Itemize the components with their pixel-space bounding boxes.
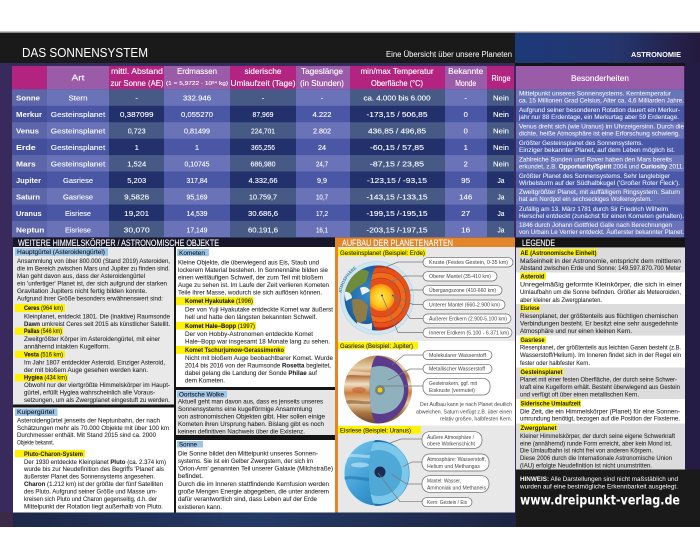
legend entry: Zwergplanet: (IAU) erfolgte Neudefinition ist nicht unumstritten. — [520, 463, 652, 470]
panel: Gasriese — [338, 341, 515, 426]
panel: Kometen: lockerem Material bestehen. In Sonnennähe bilden sie — [178, 267, 328, 274]
table row: Jupiter: Jupiter — [16, 176, 41, 185]
column: Besonderheiten text: Wirbelsturm auf der Südhalbkugel ('Großer Roter Fleck'). — [519, 180, 680, 187]
panel: Gasriese: Gasriese (Beispiel: Jupiter) — [340, 343, 413, 350]
legend entry: Gasriese: Riesenplanet, der größtenteils aus leichten Gasen besteht (z.B. — [520, 345, 681, 352]
panel: Sonne: große Mengen Energie abgegeben, die unter anderem — [178, 489, 329, 496]
legend entry: AE: Abstand zwischen Erde und Sonne: 149.597.870.700 Meter — [520, 265, 682, 272]
legend entry: Siderische Umlaufzeit: umrundung benötigt, bezogen auf die Position der Fixsterne. — [520, 416, 680, 423]
table row: Erde: Erde — [16, 143, 36, 152]
caption: Aufbau: abweichen. Saturn verfügt z.B. über einen — [416, 409, 512, 415]
table header row: mittl. Abstand — [111, 67, 163, 76]
table header row: zur Sonne (AE) — [110, 79, 164, 88]
table row: Sonne: Sonne — [16, 94, 40, 102]
panel: Hauptgürtel: Kleinplanet, entdeckt 1801. Die (inaktive) Raumsonde — [24, 314, 170, 320]
callouts: jupiter layers: Eiskruste (vermutet) — [429, 388, 475, 394]
table row: Sonne: 332.946 — [183, 94, 211, 102]
table row: Merkur: 0,055270 — [181, 110, 213, 119]
section heading: Aufbau der Planetenarten: AUFBAU DER PLANETENARTEN — [342, 238, 453, 248]
caption: Aufbau: Der Aufbau kann je nach Planet deutlich — [420, 402, 512, 408]
panel: Hauptgürtel: Ansammlung von über 800.000 (Stand 2019) Asteroiden, — [17, 258, 170, 265]
table row: Jupiter: 9,9 — [317, 176, 327, 185]
table row: Erde — [16, 143, 509, 152]
table row: Jupiter: 4.332,66 — [248, 176, 278, 185]
table row: Uranus: -199,15 /-195,15 — [366, 209, 428, 218]
panel: Oortsche Wolke: Aktuell geht man davon aus, dass es jenseits unseres — [178, 398, 324, 406]
panel: Oortsche Wolke: Kometen ihren Ursprung haben. Bislang gibt es noch — [178, 421, 324, 428]
table row: Uranus: 17,2 — [316, 209, 328, 218]
subtitle: Eine Übersicht über unsere Planeten — [386, 50, 512, 59]
column: Besonderheiten text: Herschel entdeckt (zunächst für einen Kometen gehalten). — [519, 213, 684, 220]
column: Besonderheiten text: Größter Planet des Sonnensystems. Sehr langlebiger — [519, 173, 670, 180]
table row: Jupiter: 95 — [461, 176, 470, 185]
panel: Kuipergürtel: Asteroidengürtel jenseits der Neptunbahn, der nach — [17, 417, 160, 424]
panel: Sonne: Sonne — [179, 442, 197, 448]
panel: Gesteinsplanet: Gesteinsplanet (Beispiel: Erde) — [340, 250, 425, 257]
panel: Kometen: Kometen — [179, 250, 205, 257]
table header row: Tageslänge — [301, 67, 343, 76]
table row: Venus: Venus — [16, 126, 39, 136]
caption: Aufbau — [416, 402, 512, 422]
table header row: Monde — [455, 79, 476, 88]
icon: earth cross-section: ATMOSPHÄRE — [338, 266, 356, 293]
table row: Erde: 24 — [318, 143, 326, 152]
legend entry: Zwergplanet: Kleiner Himmelskörper, der durch seine eigene Schwerkraft — [520, 433, 675, 440]
column: Besonderheiten text: Zahlreiche Sonden und Rover haben den Mars bereits — [519, 156, 672, 163]
table row: Saturn: Saturn — [16, 192, 40, 201]
table row: Uranus — [16, 209, 505, 218]
icon: jupiter cross-section — [344, 355, 423, 424]
table row: Mars: Mars — [16, 160, 36, 168]
panel: Kuipergürtel: Kuipergürtel — [17, 409, 55, 416]
table header row: Oberfläche (°C) — [371, 79, 423, 88]
table row: Mars: -87,15 / 23,85 — [370, 160, 424, 168]
table row: Venus: Gesteinsplanet — [51, 126, 106, 136]
callouts: jupiter layers: Metallischer Wasserstoff — [429, 367, 486, 373]
panel: Kuipergürtel: Objekte bekannt. — [17, 440, 54, 447]
panel: Hauptgürtel: Man geht davon aus, dass der Asteroidengürtel — [17, 273, 145, 280]
table row: Jupiter — [16, 176, 505, 185]
table row: Jupiter: 5,203 — [127, 176, 146, 185]
panel: Oortsche Wolke — [176, 387, 335, 436]
table row: Neptun: Eisriese — [65, 225, 91, 234]
legend entry: Zwergplanet: Diese 2006 durch die Internationale Astronomische Union — [520, 455, 672, 462]
table row: Mars: Nein — [493, 160, 509, 168]
panel: Kometen: 2014 bis 2016 von der Raumsonde Rosetta begleitet, — [185, 363, 331, 370]
panel: Kuipergürtel: des Pluto. Aufgrund seiner Größe und Masse um- — [24, 489, 157, 496]
callouts: earth layers: Übergangszone (410-660 km) — [429, 287, 496, 294]
legend entry: Gasriese: Wasserstoff/Helium). Im Inneren findet sich in der Regel ein — [520, 352, 681, 359]
callouts: earth layers: Kruste (Festes Gestein, 0-35 km) — [429, 260, 508, 266]
table row: Merkur: 0 — [464, 110, 468, 119]
legend entry: Gesteinsplanet: Gesteinsplanet — [520, 369, 563, 376]
panel: Sonne: Durch die im Inneren stattfindende Kernfusion werden — [178, 481, 329, 488]
legend entry: Eisriese: Eisriese — [520, 305, 540, 312]
table row: Saturn — [16, 192, 505, 201]
panel: Kuipergürtel: Mittelpunkt der Rotation liegt außerhalb von Pluto. — [24, 504, 163, 511]
panel: Oortsche Wolke: Sonnensystems eine kugelförmige Ansammlung — [178, 406, 312, 413]
table row: Neptun: -203,15 /-197,15 — [366, 225, 428, 234]
panel: Hauptgürtel: annähernd intakten Kugelform. — [24, 344, 110, 350]
table row: Jupiter: 317,84 — [186, 176, 208, 185]
panel: Hauptgürtel: Pallas (546 km) — [24, 328, 62, 335]
table row: Merkur: Nein — [493, 110, 509, 119]
legend entry: Zwergplanet — [520, 424, 675, 470]
footer note and website — [516, 470, 700, 527]
table header row: (1 = 5,9722 · 10²⁴ kg) — [166, 81, 228, 87]
legend entry: Zwergplanet: Zwergplanet — [520, 425, 557, 432]
legend entry: Gesteinsplanet: und verfügt oft über einen metallischen Kern. — [520, 392, 639, 399]
table row: Jupiter: -123,15 / -93,15 — [367, 176, 427, 185]
panel: Legende: LEGENDE — [522, 238, 555, 248]
callouts: uranus layers: Mantel: Wasser, — [427, 479, 461, 485]
panel: Kometen: Nicht mit bloßem Auge beobachtbarer Komet. Wurde — [185, 355, 333, 362]
panel: Kuipergürtel: wurde bis zur Neudefinition des Begriffs 'Planet' als — [23, 466, 165, 473]
legend entry: Gasriese: fester oder halbfester Kern. — [520, 360, 590, 367]
column: Besonderheiten text: dichte, heiße Atmosphäre ist eine Erforschung schwierig. — [519, 130, 680, 138]
legend entry: Siderische Umlaufzeit — [520, 400, 680, 423]
panel: Kometen: einen weitläufigen Schweif, der zum Teil mit bloßem — [178, 274, 323, 282]
panel: Kuipergürtel: Charon (1.212 km) ist der größte der fünf Satelliten — [24, 481, 163, 488]
note: wurden auf eine bestmögliche Erkennbarkeit ausgelegt. — [519, 483, 678, 490]
panel: Hauptgürtel: Obwohl nur der viertgrößte Himmelskörper im Haupt- — [24, 382, 170, 389]
table row: Erde: 365,256 — [251, 143, 275, 152]
legend entry: Gasriese — [520, 337, 681, 367]
table row: Sonne: Nein — [493, 94, 509, 102]
legend entry: Asteroid: aber kleiner als Zwergplaneten. — [520, 297, 602, 304]
panel: Kometen: Der von Yuji Hyakutake entdeckte Komet war äußerst — [185, 306, 333, 314]
category label: ASTRONOMIE — [631, 50, 681, 59]
table row: Merkur: Merkur — [16, 110, 42, 119]
panel: Kuipergürtel: Schätzungen mehr als 70.000 Objekte mit über 100 km — [17, 425, 169, 432]
legend entry: Siderische Umlaufzeit: Die Zeit, die ein Himmelskörper (Planet) für eine Sonnen- — [520, 409, 680, 416]
table row: Merkur: Gesteinsplanet — [51, 110, 106, 119]
title: DAS SONNENSYSTEM — [22, 45, 148, 60]
column: Besonderheiten text: Aufgrund seiner besonderen Rotation dauert ein Merkur- — [519, 107, 680, 114]
table row: Saturn: 10,7 — [316, 192, 328, 201]
column: Besonderheiten text — [518, 91, 685, 236]
callouts: uranus layers — [422, 432, 489, 507]
panel: Eisriese — [338, 426, 515, 512]
legend entry: Zwergplanet: Die Umlaufbahn ist nicht frei von anderen Körpern. — [520, 448, 653, 455]
panel: Gesteinsplanet — [338, 247, 515, 341]
table row: Mars: 1,524 — [127, 160, 146, 168]
table header row: Erdmassen — [177, 67, 217, 76]
panel: Sonne: Die Sonne bildet den Mittelpunkt unseres Sonnen- — [178, 450, 318, 458]
panel: Hauptgürtel: setzungen, um als Zwergplanet eingestuft zu werden. — [24, 397, 170, 404]
table row: Venus: Nein — [493, 126, 509, 136]
column: Besonderheiten text: Zweitgrößter Planet, mit auffälligem Ringsystem. Saturn — [519, 189, 681, 196]
panel: Sonne: systems. Sie ist ein Gelber Zwergstern, der sich im — [178, 458, 313, 465]
table header row — [12, 66, 684, 89]
table header row: min/max Temperatur — [360, 67, 434, 76]
panel: Kuipergürtel: Durchmesser enthält. Mit Stand 2015 sind ca. 2000 — [17, 432, 156, 439]
table row: Venus: 0,81499 — [184, 126, 210, 136]
table row: Erde: -60,15 / 57,85 — [370, 143, 424, 152]
legend entry: Asteroid — [520, 273, 683, 304]
table header row: Art — [72, 74, 86, 82]
panel: Kuipergürtel: äußerster Planet des Sonnensystems angesehen. — [24, 474, 155, 481]
icon: earth cross-section — [338, 261, 423, 335]
column: Besonderheiten text: Mittelpunkt unseres Sonnensystems. Kerntemperatur — [519, 91, 671, 98]
callouts: earth layers: Äußerer Erdkern (2.900-5.100 km) — [429, 316, 507, 322]
panel: Kuipergürtel — [13, 404, 176, 512]
column: Besonderheiten text: Venus dreht sich (wie Uranus) im Uhrzeigersinn. Durch die — [519, 124, 685, 130]
section heading: Aufbau der Planetenarten — [335, 238, 515, 512]
panel: Kometen: Komet Hale–Bopp (1997) — [185, 323, 255, 330]
legend entry: Gesteinsplanet: Planet mit einer festen Oberfläche, der durch seine Schwer- — [520, 377, 677, 384]
legend entry: Asteroid: Umlaufbahn um die Sonne befinden. Größer als Meteoroiden, — [520, 289, 681, 296]
table row: Merkur: -173,15 / 506,85 — [366, 110, 428, 119]
table header row: Besonderheiten — [571, 74, 629, 83]
table row: Sonne: Stern — [68, 94, 88, 102]
table header row: Ringe — [492, 74, 510, 83]
panel: Hauptgürtel — [13, 247, 174, 404]
panel: Kometen: hell und hatte den längsten bekannten Schweif. — [185, 314, 317, 321]
table row: Uranus: Eisriese — [65, 209, 91, 218]
table row: Jupiter: Ja — [498, 176, 505, 185]
table row: Saturn: -143,15 /-133,15 — [366, 192, 428, 201]
table row: Mars: 686,980 — [250, 160, 276, 168]
column: Besonderheiten text: hat am Nordpol ein sechseckiges Wolkensystem. — [519, 196, 652, 203]
table row: Neptun: 17,149 — [186, 225, 208, 234]
panel: Kometen — [174, 247, 335, 512]
table row: Uranus: 19,201 — [124, 209, 149, 218]
callouts: earth layers: Innerer Erdkern (5.100 - 6.371 km) — [429, 330, 509, 336]
legend entry: Asteroid: Asteroid — [520, 274, 544, 280]
panel: Kometen: Teile ihrer Masse, wodurch sie sich auflösen können. — [178, 290, 322, 296]
callouts: uranus layers: Atmosphäre: Wasserstoff, — [427, 457, 486, 463]
table row: Neptun: 16,1 — [316, 225, 328, 234]
table row: Neptun: 60.191,6 — [248, 225, 278, 234]
table row: Mars: Gesteinsplanet — [51, 160, 106, 168]
table row: Mars: 0,10745 — [184, 160, 210, 168]
table row: Mars — [16, 160, 509, 168]
panel: Kometen: dabei gelang die Landung der Sonde Philae auf — [185, 370, 317, 377]
callouts: jupiter layers: Molekularer Wasserstoff — [429, 353, 487, 359]
callouts: uranus layers: Ammoniak und Methaneis — [427, 486, 486, 492]
table row: Uranus: Ja — [498, 209, 505, 218]
column: Besonderheiten text: erkundet, z.B. Opportunity/Spirit 2004 und Curiosity 2011. — [519, 163, 684, 170]
callouts: earth layers: Unterer Mantel (660-2.900 km) — [429, 302, 500, 308]
table header row: (in Stunden) — [300, 79, 344, 88]
panel: Hauptgürtel: Vesta (516 km) — [24, 352, 63, 358]
table row: Merkur — [16, 110, 509, 119]
legend entry: Gesteinsplanet: kraft eine Kugelform erhält. Besteht überwiegend aus Gestein — [520, 384, 680, 391]
callouts: uranus layers: obere Wolkenschicht — [427, 442, 476, 448]
panel: Hauptgürtel: Gravitation Jupiters nicht fertig bilden konnte. — [17, 288, 147, 295]
panel: Hauptgürtel: Ceres (964 km) — [24, 305, 63, 312]
legend entry: AE: Maßeinheit in der Astronomie, entspricht dem mittleren — [520, 258, 681, 265]
table row: Venus: 224,701 — [251, 126, 275, 136]
legend entry: Gasriese: Gasriese — [520, 337, 545, 344]
panel: Hauptgürtel: Hygiea (434 km) — [24, 375, 67, 382]
table row: Venus: 2.802 — [313, 126, 331, 136]
panel: Oortsche Wolke: von astronomischen Objekten gibt. Hier sollen einige — [178, 414, 325, 420]
panel: Hauptgürtel: die im Bereich zwischen Mars und Jupiter zu finden sind. — [17, 266, 170, 272]
callouts: earth layers: Oberer Mantel (35-410 km) — [429, 274, 491, 280]
panel: Oortsche Wolke: keinen definitiven Nachweis über die Existenz. — [178, 428, 305, 436]
table row: Saturn: Ja — [498, 192, 505, 201]
table row: Mars: 2 — [464, 160, 468, 168]
table row: Sonne: - — [321, 94, 324, 102]
panel: Hauptgürtel: Dawn umkreist Ceres seit 2015 als künstlicher Satellit. — [24, 321, 170, 328]
panel: Kometen: Kleine Objekte, die überwiegend aus Eis, Staub und — [178, 260, 319, 266]
legend entry: Eisriese: Verbindungen besteht. Er besitzt eine sehr ausgedehnte — [520, 321, 678, 328]
note — [519, 476, 678, 490]
table row: Saturn: 95,169 — [186, 192, 208, 201]
table row: Sonne: - — [464, 94, 467, 102]
legend entry: Gesteinsplanet — [520, 368, 680, 399]
column: Besonderheiten text: jahr nur 88 Erdentage, ein Merkurtag aber 59 Erdentage. — [518, 114, 679, 121]
table row: Erde: Gesteinsplanet — [51, 143, 106, 152]
panel: Kometen: Komet Tschurjumow-Gerassimenko — [185, 347, 284, 354]
table header row: Bekannte — [448, 67, 483, 76]
table row: Merkur: 87,969 — [252, 110, 274, 119]
callouts: uranus layers: Helium und Methangas — [427, 464, 480, 470]
table row: Uranus: Uranus — [16, 209, 42, 218]
table row: Sonne: - — [262, 94, 265, 102]
table row: Merkur: 4.222 — [312, 110, 332, 119]
table row: Mars: 24,7 — [316, 160, 328, 168]
callouts: jupiter layers — [423, 351, 492, 395]
table row: Neptun: Ja — [498, 225, 505, 234]
note: HINWEIS: Alle Darstellungen sind nicht maßstäblich und — [520, 476, 678, 483]
table row: Erde: 1 — [464, 143, 468, 152]
table row: Erde: 1 — [135, 143, 139, 152]
panel: Kuipergürtel: Der 1930 entdeckte Kleinplanet Pluto (ca. 2.374 km) — [24, 459, 166, 466]
panel: Hauptgürtel: ein 'unfertiger' Planet ist, der sich aufgrund der starken — [17, 280, 167, 288]
callouts: earth layers — [423, 258, 513, 337]
panel: Eisriese: Eisriese (Beispiel: Uranus) — [340, 427, 411, 434]
table row: Saturn: 146 — [459, 192, 472, 201]
panel: Sonne — [176, 435, 335, 512]
table row: Saturn: 10.759,7 — [249, 192, 277, 201]
panel: Hauptgürtel: Zweitgrößter Körper im Asteroidengürtel, mit einer — [24, 336, 161, 343]
table row: Neptun — [16, 225, 505, 234]
panel: Oortsche Wolke: Oortsche Wolke — [179, 392, 224, 399]
panel: Sonne: 'Orion-Arm' genannten Teil unserer Galaxie (Milchstraße) — [178, 466, 333, 472]
callouts: uranus layers: Kern: Gestein / Eis — [427, 500, 467, 506]
panel: Hauptgürtel: Im Jahr 1807 entdeckter Asteroid. Einziger Asteroid, — [24, 360, 165, 366]
legend entry: Eisriese: Atmosphäre und nur einen kleinen Kern. — [520, 328, 632, 335]
panel: Hauptgürtel: gürtel, erfüllt Hygiea wahrscheinlich alle Voraus- — [24, 390, 155, 396]
table row: Sonne — [16, 94, 509, 102]
panel: Kometen: Komet Hyakutake (1996) — [185, 298, 253, 305]
section heading: Weitere Himmelskörper: WEITERE HIMMELSKÖRPER / ASTRONOMISCHE OBJEKTE — [18, 238, 219, 248]
table row: Venus: 0,723 — [128, 126, 146, 136]
icon: uranus cross-section — [344, 439, 422, 506]
table row: Erde: Nein — [493, 143, 509, 152]
column: Besonderheiten text: Zufällig am 13. März 1781 durch Sir Friedrich Wilhelm — [519, 206, 668, 213]
table row: Sonne: ca. 4.000 bis 6.000 — [364, 94, 430, 102]
table row: Venus: 436,85 / 496,85 — [368, 126, 426, 136]
table row: Uranus: 30.686,6 — [248, 209, 278, 218]
legend entry: Zwergplanet: eine (annähernd) runde Form erreicht, aber kein Mond ist. — [520, 440, 672, 447]
table row: Venus — [16, 126, 509, 136]
column: Besonderheiten text: ca. 15 Millionen Grad Celsius, Alter ca. 4,6 Milliarden Jahre. — [519, 98, 684, 105]
panel: Hauptgürtel: Hauptgürtel (Asteroidengürtel) — [17, 249, 105, 256]
table row: Neptun: Neptun — [16, 225, 45, 234]
panel: Kometen: dem Kometen. — [185, 378, 225, 385]
table row: Saturn: Gasriese — [63, 192, 93, 201]
table row: Erde: 1 — [195, 143, 199, 152]
column: Besonderheiten text: von Urbain Le Verrier entdeckt. Äußerster bekannter Planet. — [519, 228, 684, 236]
legend entry: Eisriese: Riesenplanet, der größtenteils aus flüchtigen chemischen — [520, 313, 678, 320]
panel: Kometen: Auge zu sehen ist. Im Laufe der Zeit verlieren Kometen — [178, 282, 329, 289]
table row: Neptun: 16 — [461, 225, 470, 234]
table row: Uranus: 27 — [461, 209, 470, 218]
legend entry: Eisriese — [520, 304, 678, 335]
table cell background — [12, 89, 684, 237]
table row: Uranus: 14,539 — [186, 209, 208, 218]
table row: Jupiter: Gasriese — [63, 176, 93, 185]
panel: Sonne: dafür verantwortlich sind, dass Leben auf der Erde — [178, 496, 317, 503]
panel: Sonne: befindet. — [178, 473, 203, 480]
legend entry: AE — [520, 249, 682, 272]
column: Besonderheiten text: 1846 durch Johann Gottfried Galle nach Berechnungen — [519, 222, 672, 229]
panel: Sonne: existieren kann. — [178, 504, 222, 511]
legend entry: Siderische Umlaufzeit: Siderische Umlaufzeit — [520, 401, 581, 408]
header bar — [0, 33, 700, 66]
column: Besonderheiten text: Größter Gesteinsplanet des Sonnensystems. — [519, 140, 643, 147]
caption: Aufbau: relativ großen, halbfesten Kern. — [440, 416, 512, 422]
panel: Hauptgürtel: der mit bloßem Auge gesehen werden kann. — [24, 367, 148, 374]
panel: Legende — [515, 238, 685, 470]
table header row: Umlaufzeit (Tage) — [230, 79, 296, 88]
table header row: siderische — [244, 67, 282, 76]
table row: Merkur: 0,387099 — [120, 110, 154, 119]
panel: Kometen: Der von Hobby-Astronomen entdeckte Komet — [185, 331, 313, 338]
panel: Kuipergürtel: kreisen sich Pluto und Charon gegenseitig, d.h. der — [24, 496, 158, 503]
table row: Saturn: 9,5826 — [124, 192, 149, 201]
legend entry: AE: AE (Astronomische Einheit) — [520, 250, 596, 257]
callouts: uranus layers: Äußere Atmosphäre / — [427, 434, 474, 441]
callouts: jupiter layers: Gesteinskern, ggf. mit — [429, 381, 477, 387]
panel: Kometen: Hale–Bopp war insgesamt 18 Monate lang zu sehen. — [185, 338, 330, 346]
panel: Hauptgürtel: Aufgrund ihrer Größe besonders erwähnenswert sind: — [17, 296, 163, 302]
panel: Kuipergürtel: Pluto-Charon-System — [24, 451, 83, 458]
table row: Sonne: - — [135, 94, 138, 102]
legend entry: Asteroid: Unregelmäßig geformte Kleinkörper, die sich in einer — [520, 282, 683, 289]
column: Besonderheiten text: Einziger bekannter Planet, auf dem Leben möglich ist. — [519, 147, 675, 154]
table row: Venus: 0 — [464, 126, 468, 136]
table row: Neptun: 30,070 — [124, 225, 150, 234]
